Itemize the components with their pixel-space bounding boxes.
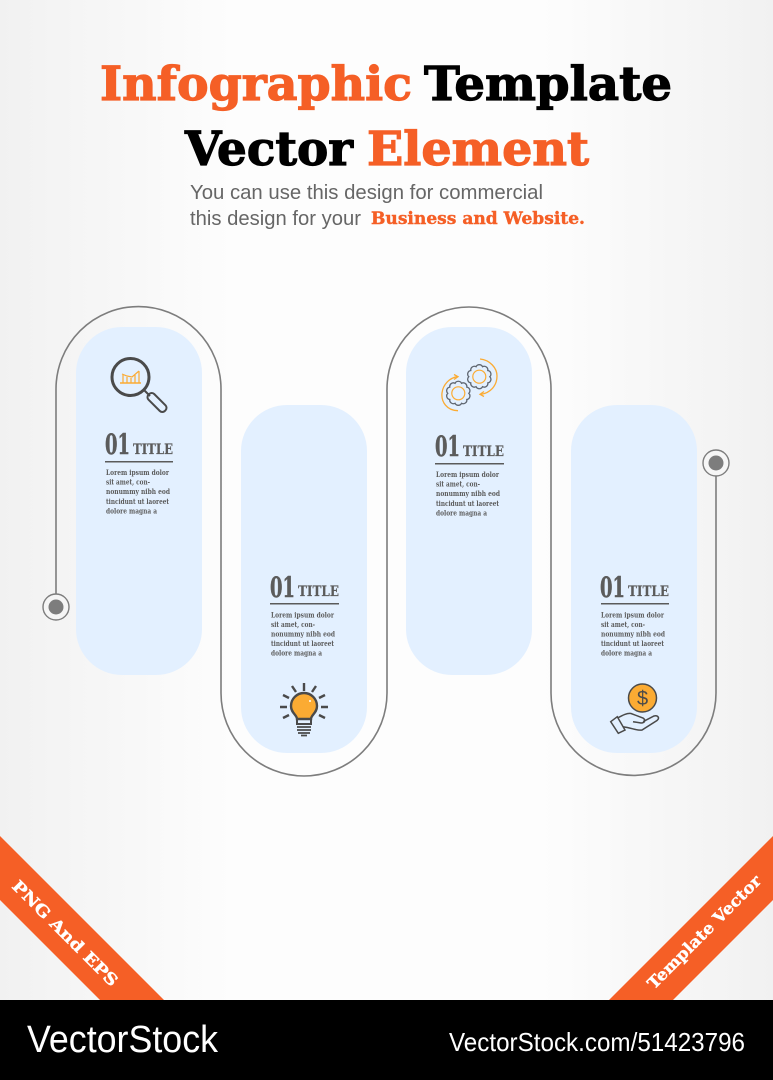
start node (43, 594, 69, 620)
text block: card 4: dolore magna a (601, 649, 652, 658)
text block: card 4: nonummy nibh eod (601, 630, 665, 638)
subtitle: this design for your (190, 208, 361, 230)
ribbon: right corner: Template Vector (643, 871, 765, 993)
title: Element (367, 122, 589, 177)
text block: card 2: dolore magna a (271, 649, 322, 658)
text block: card 3: dolore magna a (436, 508, 487, 517)
text block: card 3: Lorem ipsum dolor (436, 470, 499, 479)
text block: card 4: tincidunt ut laoreet (601, 639, 665, 648)
icon: gears with arrows (442, 359, 497, 411)
text block: card 2: nonummy nibh eod (271, 630, 335, 638)
text block: card 3: 01 (435, 430, 460, 463)
footer bar: VectorStock.com/51423796 (449, 1027, 745, 1057)
subtitle (190, 182, 585, 230)
text block: card 4: 01 (600, 571, 625, 604)
text block: card 3: nonummy nibh eod (436, 489, 500, 498)
text block: card 3: tincidunt ut laoreet (436, 499, 500, 508)
ribbon: left corner (0, 836, 164, 1000)
icon: hand with coin (611, 684, 658, 733)
footer bar: VectorStock (27, 1019, 219, 1061)
icon: hand with coin: $ (637, 688, 648, 710)
text block: card 1: Lorem ipsum dolor (106, 468, 169, 477)
text block: card 1: nonummy nibh eod (106, 487, 170, 496)
text block: card 2: sit amet, con- (271, 620, 315, 629)
text block: card 3: TITLE (463, 444, 504, 460)
panel: card 4 (571, 405, 697, 753)
subtitle: Business and Website. (371, 209, 585, 229)
subtitle: You can use this design for commercial (190, 182, 543, 204)
text block: card 2: TITLE (298, 584, 339, 600)
ribbon: left corner: PNG And EPS (8, 876, 122, 990)
text block: card 2: 01 (270, 571, 295, 604)
text block: card 2: Lorem ipsum dolor (271, 610, 334, 619)
panel: card 3 (406, 327, 532, 675)
text block: card 1 (105, 428, 173, 515)
ribbon: right corner (609, 836, 773, 1000)
title: Template (424, 57, 672, 112)
title: Infographic (100, 57, 412, 112)
icon: magnifier with chart (112, 358, 168, 413)
text block: card 1: dolore magna a (106, 506, 157, 515)
text block: card 3: sit amet, con- (436, 480, 480, 489)
title: Vector (184, 122, 354, 177)
text block: card 4: Lorem ipsum dolor (601, 610, 664, 619)
end node (703, 450, 729, 476)
text block: card 4: TITLE (628, 584, 669, 600)
footer bar (0, 1000, 773, 1080)
winding timeline line (56, 307, 716, 776)
text block: card 2 (270, 571, 339, 658)
text block: card 1: tincidunt ut laoreet (106, 497, 170, 506)
panel: card 1 (76, 327, 202, 675)
text block: card 1: 01 (105, 428, 130, 461)
icon: light bulb (280, 683, 328, 736)
text block: card 1: TITLE (133, 442, 173, 458)
panel: card 2 (241, 405, 367, 753)
text block: card 4: sit amet, con- (601, 620, 645, 629)
text block: card 1: sit amet, con- (106, 478, 150, 487)
text block: card 3 (435, 430, 504, 517)
text block: card 4 (600, 571, 669, 658)
text block: card 2: tincidunt ut laoreet (271, 639, 335, 648)
title (100, 57, 672, 177)
